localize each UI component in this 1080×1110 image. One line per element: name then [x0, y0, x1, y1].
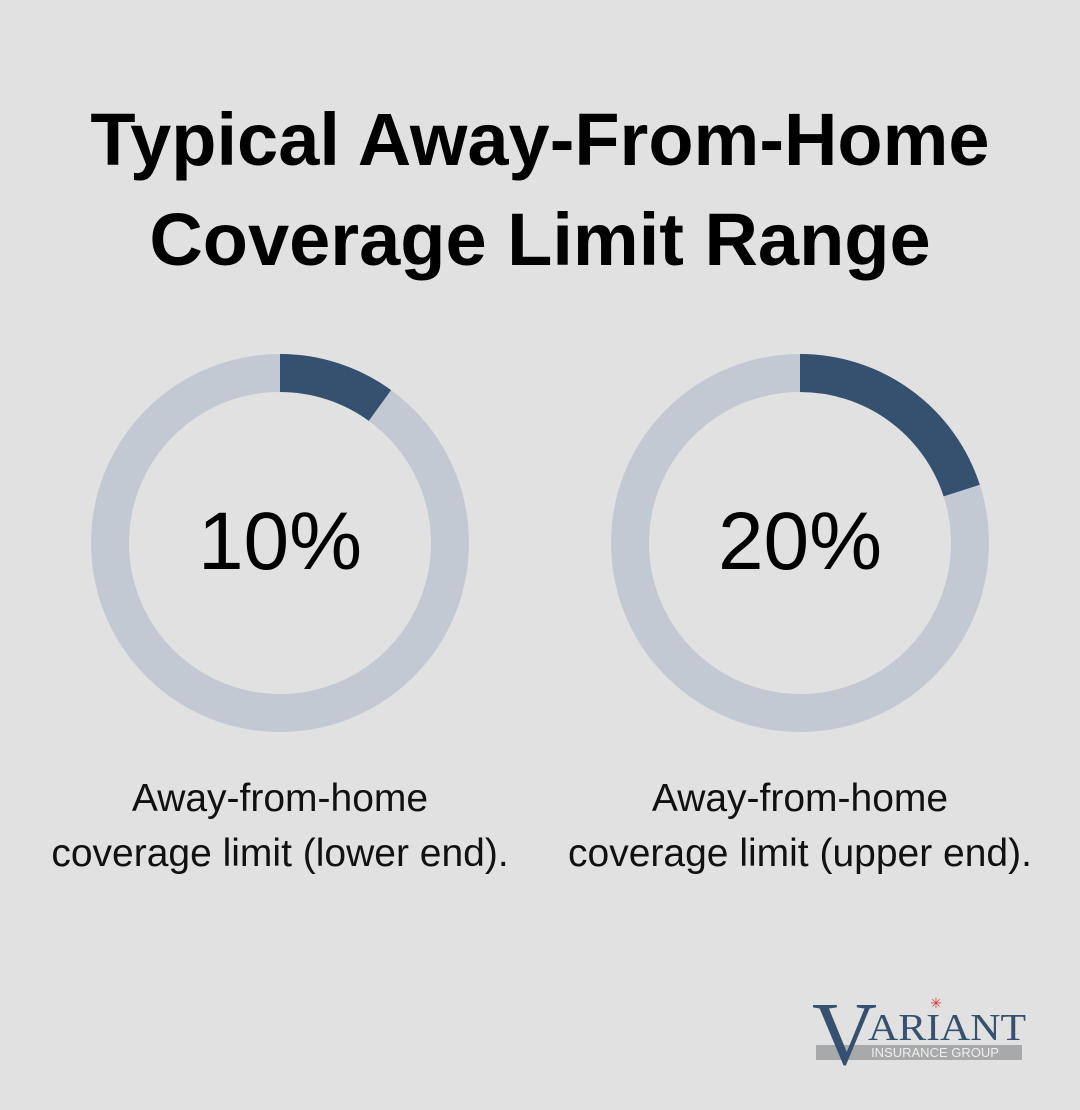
donut chart: 20%: 20%: [718, 496, 882, 587]
label: lower end: coverage limit (lower end).: [51, 832, 509, 875]
label: lower end: Away-from-home: [132, 777, 428, 820]
title: [90, 98, 990, 281]
donut chart: 10%: 10%: [198, 496, 362, 587]
label: upper end: Away-from-home: [652, 777, 948, 820]
label: lower end: [51, 777, 509, 875]
logo: Variant Insurance Group: ✳: [930, 995, 942, 1011]
logo: Variant Insurance Group: INSURANCE GROUP: [871, 1045, 999, 1060]
title: Typical Away-From-Home: [90, 98, 990, 181]
title: Coverage Limit Range: [149, 198, 931, 281]
label: upper end: [568, 777, 1032, 875]
label: upper end: coverage limit (upper end).: [568, 832, 1032, 875]
logo: Variant Insurance Group: [812, 990, 1026, 1070]
logo: Variant Insurance Group: ARIANT: [868, 1007, 1026, 1049]
